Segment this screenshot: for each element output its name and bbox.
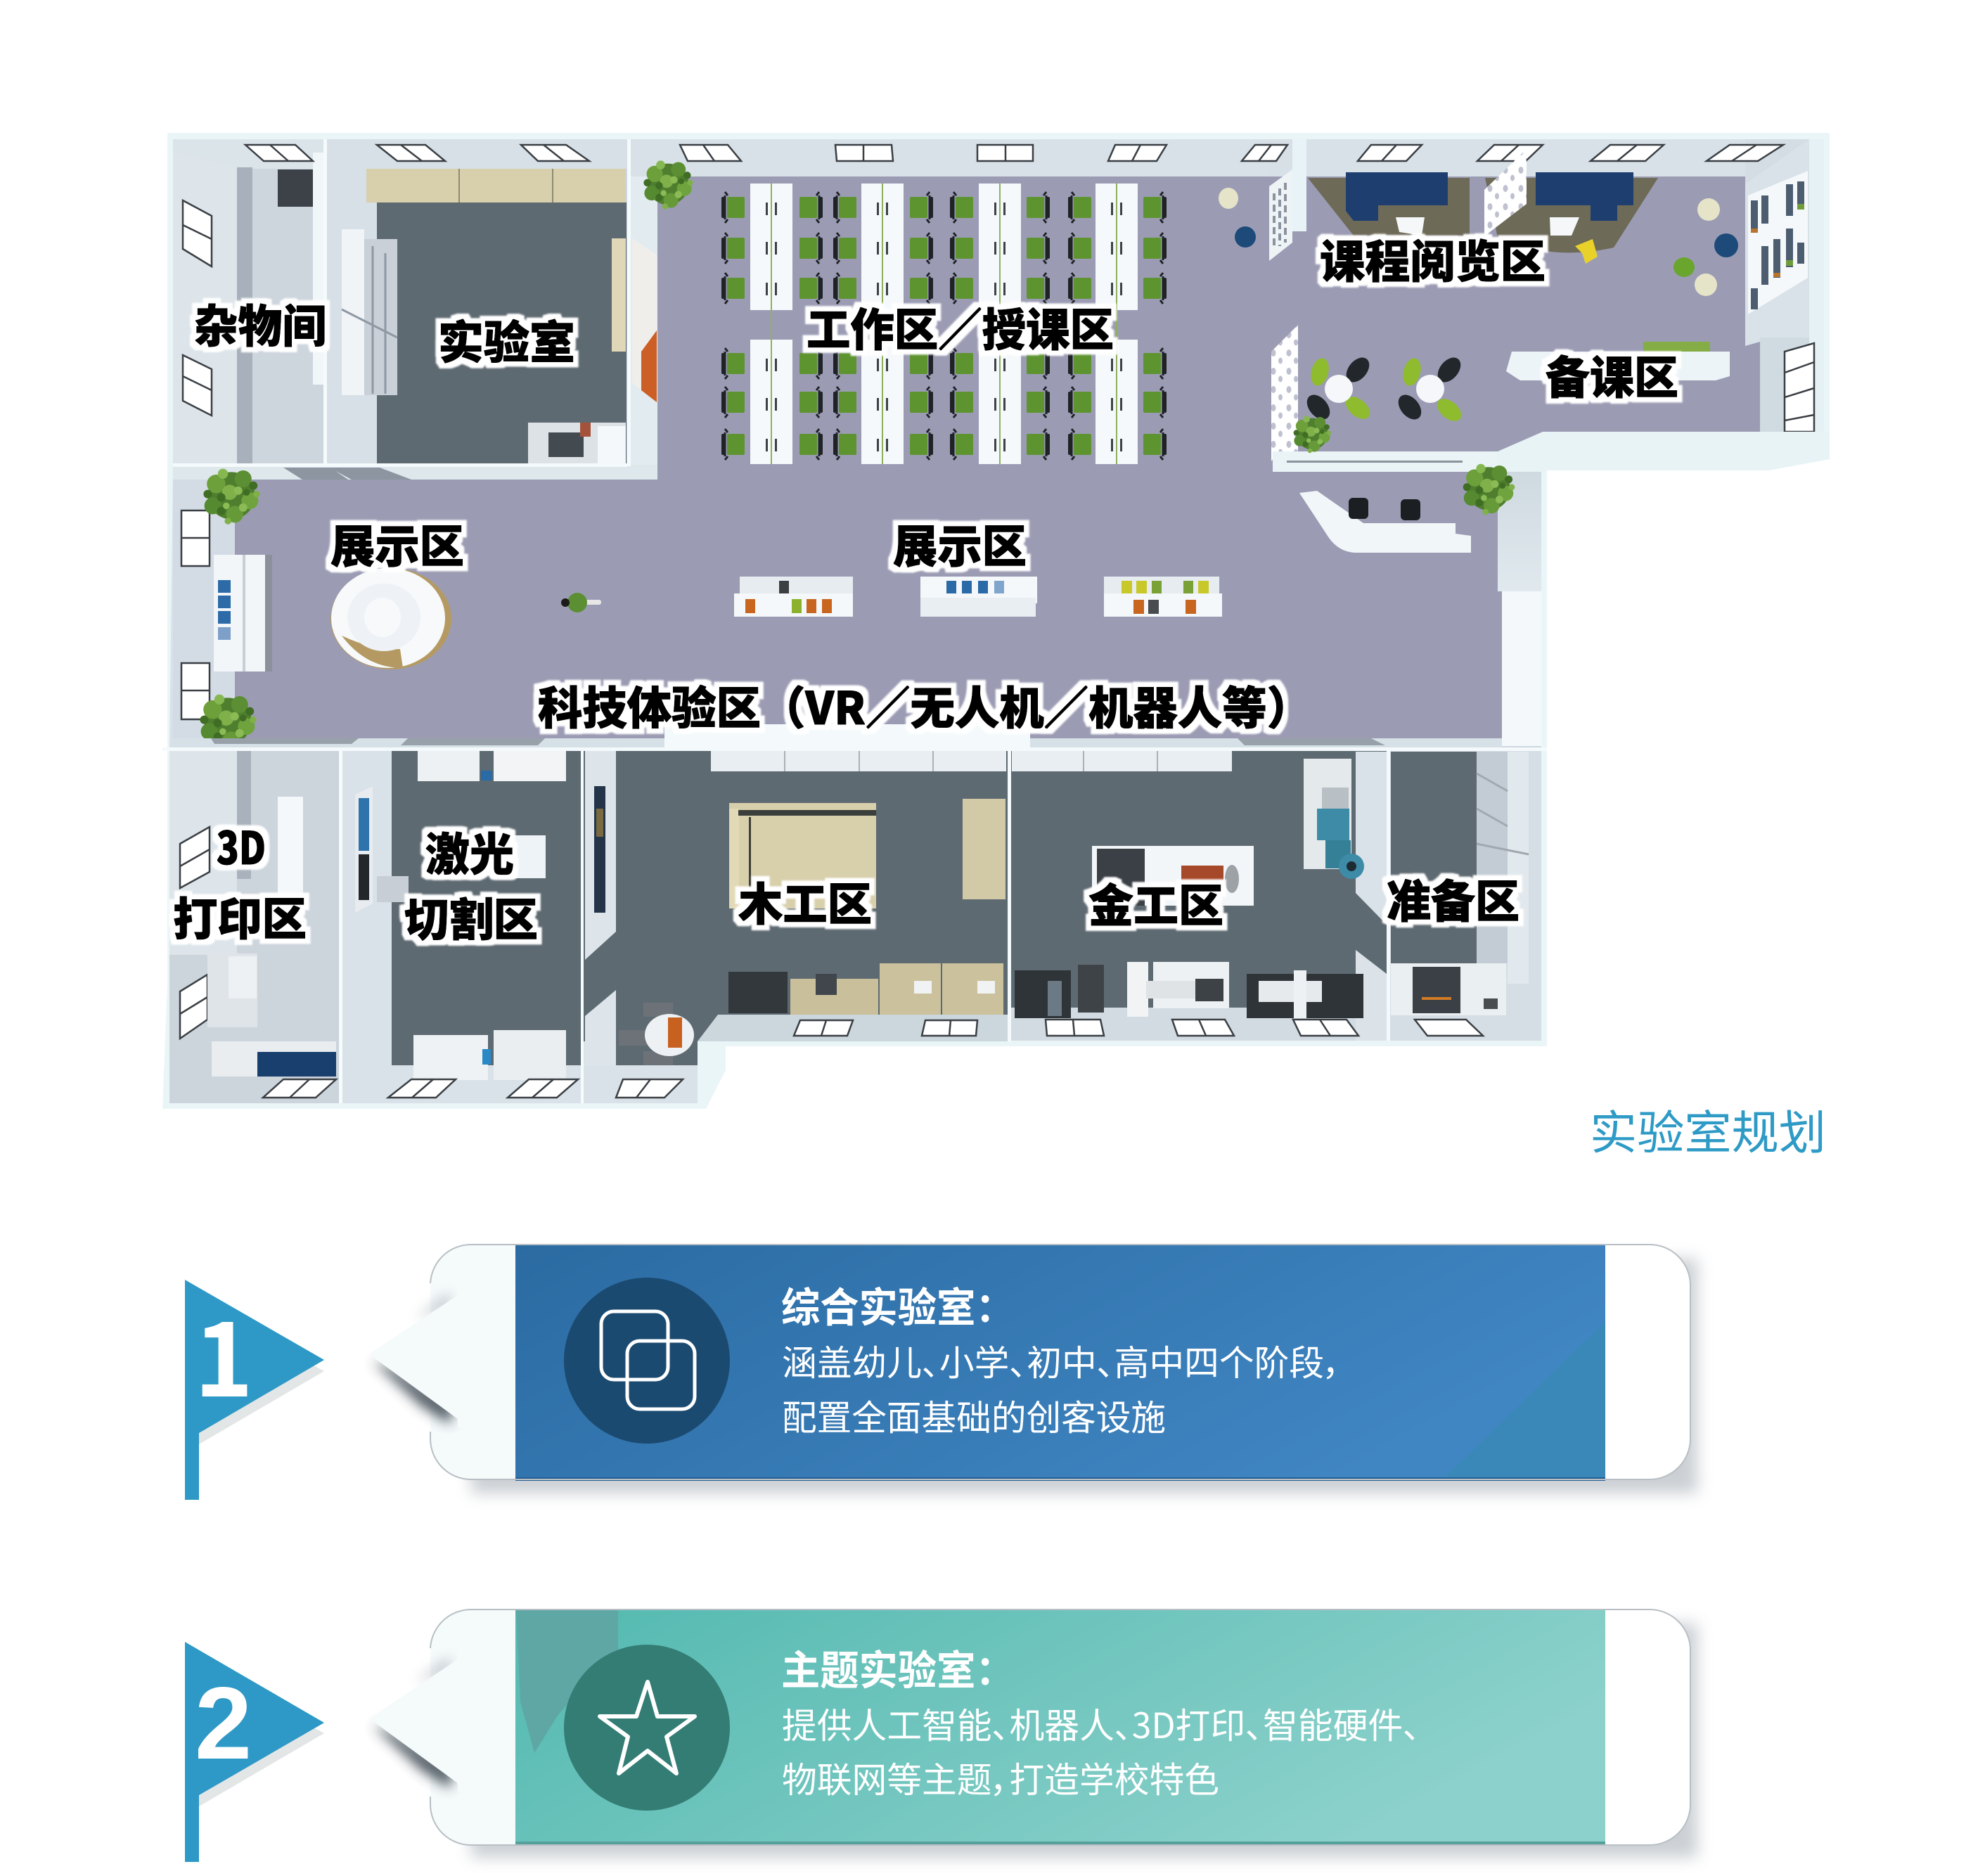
storage cage	[278, 169, 313, 207]
right window	[1760, 338, 1814, 432]
card 2: themed lab: 物联网等主题，打造学校特色	[782, 1752, 1219, 1803]
flag 1	[185, 1280, 324, 1500]
storage door strip	[313, 153, 323, 385]
painting	[632, 238, 657, 402]
label: woodwork: 木工区	[738, 869, 872, 934]
main carpet floor	[235, 176, 1760, 738]
card 2: themed lab	[185, 1610, 1697, 1862]
label: laser: 激光	[425, 819, 514, 884]
zone labels	[173, 226, 1678, 949]
woodwork room	[584, 751, 1008, 1103]
lower rooms	[169, 751, 1541, 1103]
card body	[430, 1245, 1690, 1479]
panel: lab room	[327, 139, 627, 465]
windows	[388, 1079, 578, 1098]
preparation room	[1390, 751, 1541, 1041]
panel left	[430, 1245, 515, 1479]
teal band	[515, 1610, 1605, 1845]
metalwork room	[1011, 751, 1387, 1041]
yellow chair	[1575, 239, 1598, 264]
main room top wall	[631, 139, 1269, 176]
sofas	[1346, 172, 1633, 221]
person	[561, 593, 601, 612]
wall faces	[585, 751, 616, 960]
lower machines	[1015, 965, 1104, 1018]
windows	[1046, 1020, 1358, 1036]
pointer	[369, 1659, 458, 1783]
card shadow	[471, 1624, 1697, 1858]
rooms base	[169, 139, 1824, 1103]
lab floor	[377, 203, 627, 464]
robot arm	[619, 1003, 694, 1065]
white block	[514, 835, 546, 878]
icon: overlapping squares	[601, 1311, 695, 1409]
card outline	[430, 1610, 1690, 1845]
pillar	[237, 751, 251, 879]
label: display left: 展示区	[330, 511, 464, 576]
card 1: comprehensive lab	[185, 1245, 1697, 1500]
panel: storage room	[173, 139, 323, 465]
icon circle	[564, 1645, 730, 1811]
pointer upper shadow	[415, 1292, 450, 1318]
reading area rugs	[1308, 178, 1658, 252]
printer long	[212, 1041, 336, 1077]
wood units	[790, 963, 1003, 1015]
round display table	[330, 568, 451, 669]
flag 2	[185, 1642, 324, 1862]
work table	[1092, 846, 1254, 906]
plants	[200, 160, 1515, 750]
wall shelves	[1477, 752, 1529, 984]
cabinet	[1012, 751, 1232, 771]
label: lesson prep: 备课区	[1546, 342, 1678, 407]
reception chairs	[1349, 498, 1420, 520]
label: technology experience: 科技体验区（VR／无人机／机器人等）	[538, 673, 1311, 738]
left lattice screen	[1271, 325, 1298, 461]
lab block wall	[173, 139, 657, 480]
poster	[594, 786, 605, 913]
storage left windows	[183, 200, 212, 416]
cage	[728, 972, 788, 1013]
wall faces	[1356, 752, 1387, 925]
label: display center: 展示区	[893, 511, 1027, 576]
icon: star	[600, 1682, 695, 1773]
wood cabinet	[366, 169, 626, 203]
center white counter	[664, 724, 1030, 750]
small tables	[1396, 217, 1579, 236]
window	[1415, 1020, 1483, 1036]
body text: 提供人工智能、机器人、3D打印、智能硬件、	[782, 1698, 1420, 1749]
label: 3D: 3D	[217, 813, 266, 878]
storage top wall	[173, 139, 323, 169]
flag 2: 2	[195, 1666, 252, 1780]
pointer	[369, 1295, 458, 1419]
left display counter	[214, 555, 272, 672]
label: metalwork: 金工区	[1088, 870, 1223, 935]
heading: 主题实验室：	[781, 1638, 995, 1697]
window	[263, 1079, 336, 1098]
label: printing: 打印区	[173, 884, 307, 949]
light floor strip	[698, 1015, 1008, 1041]
right outer wall	[1809, 139, 1824, 432]
3D printing room	[169, 751, 339, 1103]
label: cutting: 切割区	[404, 885, 538, 949]
pointer mask	[458, 1651, 515, 1792]
cafe tables	[1302, 353, 1465, 425]
wood shelf	[963, 799, 1006, 899]
work area chairs	[721, 192, 1167, 460]
corridor bottom wall	[162, 738, 1547, 751]
floor plan	[162, 133, 1830, 1109]
left windows	[181, 510, 210, 719]
label: lab: 实验室	[438, 307, 575, 372]
pointer shadow	[373, 1725, 454, 1788]
panel left	[430, 1610, 515, 1845]
reading partition	[1269, 139, 1306, 261]
card body	[430, 1610, 1690, 1845]
right corridor wall	[1498, 472, 1541, 746]
pointer shadow	[373, 1361, 454, 1424]
tool cabinet	[1391, 963, 1506, 1015]
bookshelf wall	[1745, 139, 1809, 346]
display table 1	[734, 577, 853, 617]
card outline	[430, 1245, 1690, 1479]
reading room top wall	[1306, 139, 1745, 176]
icon circle	[564, 1278, 730, 1444]
storage racks	[342, 229, 397, 395]
storage top window	[245, 145, 313, 161]
pump	[1304, 759, 1364, 879]
display table 3	[1104, 577, 1222, 617]
windows	[180, 827, 210, 1039]
pointer mask	[458, 1287, 515, 1427]
work area desks	[750, 184, 1138, 464]
label: preparation: 准备区	[1387, 866, 1520, 931]
poster	[355, 786, 373, 913]
white panel	[278, 797, 303, 894]
lattice screen	[1484, 149, 1527, 236]
side wood shelf	[612, 238, 626, 352]
cabinet	[711, 751, 1006, 771]
windows	[616, 1020, 977, 1098]
flag 1: 1	[194, 1280, 253, 1426]
planter wall	[1273, 432, 1830, 472]
lab machine	[528, 423, 626, 464]
wall box	[377, 876, 409, 902]
top machines	[418, 751, 566, 781]
card 1: comprehensive lab: 配置全面基础的创客设施	[782, 1390, 1166, 1441]
stools	[1219, 188, 1738, 296]
top windows	[377, 145, 1783, 161]
left show wall	[173, 480, 272, 738]
label: work area: 工作区／授课区	[807, 295, 1114, 359]
bottom machines	[413, 1030, 566, 1080]
reception desk	[1299, 491, 1471, 553]
heading: 综合实验室：	[781, 1275, 995, 1334]
display table 2	[920, 577, 1037, 617]
blue band	[515, 1245, 1605, 1481]
card shadow	[471, 1259, 1697, 1493]
printer tall	[207, 953, 257, 1027]
caption: lab planning: 实验室规划	[1590, 1096, 1826, 1163]
laser cutting room	[342, 751, 581, 1103]
outer building frame	[162, 133, 1830, 1109]
body text: 涵盖幼儿、小学、初中、高中四个阶段，	[782, 1335, 1342, 1386]
wood work table	[729, 803, 876, 908]
right door	[1502, 591, 1541, 746]
preparation table	[1506, 342, 1730, 380]
pointer upper shadow	[415, 1657, 450, 1683]
label: storage: 杂物间	[194, 291, 326, 356]
label: course reading: 课程阅览区	[1320, 226, 1546, 291]
